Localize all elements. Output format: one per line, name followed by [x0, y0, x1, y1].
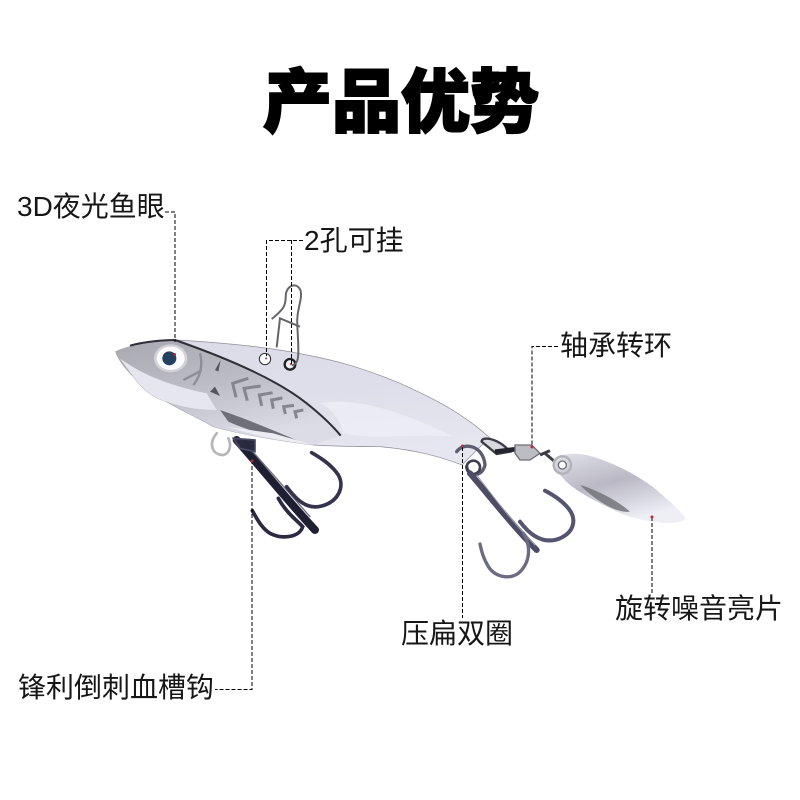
- gill lines: [183, 353, 202, 385]
- label: hook: 锋利倒刺血槽钩: [18, 672, 214, 703]
- dashed leader lines: [165, 212, 652, 690]
- bearing swivel: [482, 439, 567, 472]
- head dark ridge line: [130, 340, 341, 436]
- label: eye: 3D夜光鱼眼: [17, 191, 165, 222]
- label: two holes: 2孔可挂: [304, 225, 404, 256]
- label: double ring: 压扁双圈: [401, 618, 513, 649]
- 3D fish eye: [154, 344, 187, 372]
- spinner blade: [553, 454, 686, 523]
- body grooves: [233, 378, 303, 418]
- red leader dots: [250, 444, 654, 518]
- snap clip: [272, 285, 301, 365]
- blade ring: [554, 456, 571, 474]
- label: swivel: 轴承转环: [560, 330, 672, 361]
- lure body highlights: [320, 402, 453, 437]
- title: 产品优势: [263, 64, 539, 141]
- label: spinner blade: 旋转噪音亮片: [615, 593, 783, 624]
- lure body: [116, 340, 490, 465]
- holes: [259, 353, 295, 370]
- rear treble hook: [457, 446, 573, 577]
- blade dark reflection: [580, 485, 630, 512]
- lure head shading: [116, 340, 341, 445]
- hook: front treble hook: [212, 433, 341, 537]
